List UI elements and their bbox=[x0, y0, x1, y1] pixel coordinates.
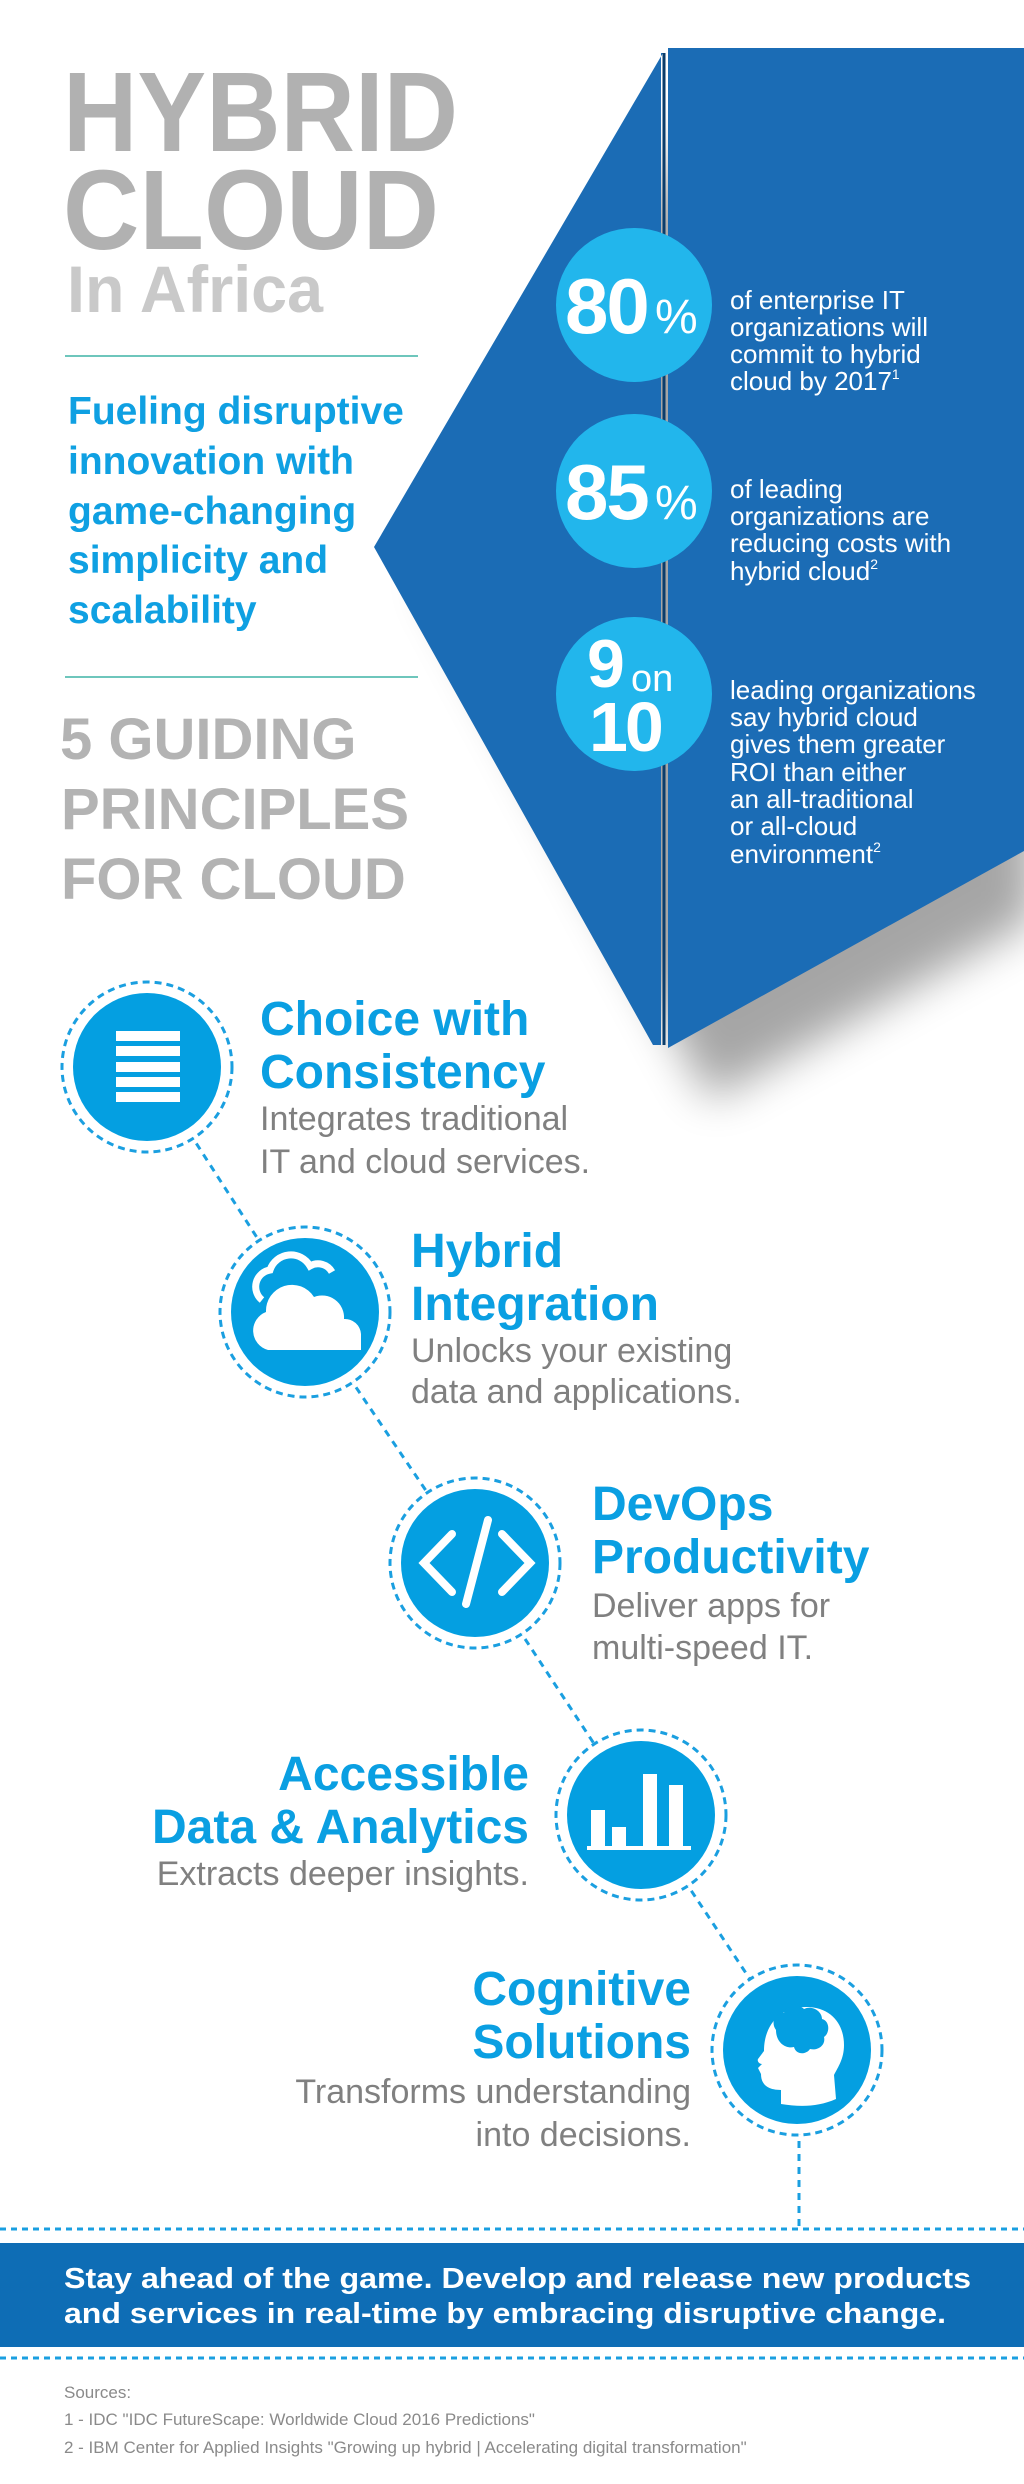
sources: 1 - IDC "IDC FutureScape: Worldwide Cloud 2016 Predictions" bbox=[64, 2410, 535, 2429]
principle 5: cognitive solutions: into decisions. bbox=[476, 2116, 691, 2154]
section heading: 5 guiding principles: FOR CLOUD bbox=[61, 847, 406, 912]
stat: 80% bbox=[556, 228, 928, 396]
banner: call to action bbox=[0, 2243, 1024, 2347]
principle 3: devops productivity: DevOps bbox=[592, 1478, 773, 1531]
banner: call to action: and services in real-time by embracing disruptive change. bbox=[64, 2298, 946, 2330]
section heading: 5 guiding principles: PRINCIPLES bbox=[61, 777, 409, 842]
principle 4: accessible data & analytics: Accessible bbox=[278, 1748, 529, 1801]
subtitle: simplicity and bbox=[68, 539, 328, 582]
stat: 9 on 10: 9 bbox=[587, 626, 625, 702]
stat: 80%: % bbox=[655, 291, 698, 344]
icon: code bbox=[390, 1478, 560, 1648]
stat: 9 on 10: say hybrid cloud bbox=[730, 702, 918, 732]
stat: 80%: commit to hybrid bbox=[730, 339, 921, 369]
stat: 85%: 2 bbox=[870, 556, 878, 572]
stat: 9 on 10: gives them greater bbox=[730, 729, 946, 759]
principle 5: cognitive solutions bbox=[295, 1963, 882, 2154]
subtitle: Fueling disruptive bbox=[68, 390, 404, 433]
stat: 9 on 10: environment bbox=[730, 839, 873, 869]
stat: 85%: hybrid cloud bbox=[730, 556, 870, 586]
principle 2: hybrid integration: Integration bbox=[411, 1278, 659, 1331]
principle 2: hybrid integration bbox=[220, 1225, 742, 1411]
principle 2: hybrid integration: data and applications. bbox=[411, 1373, 742, 1411]
title: In Africa bbox=[67, 252, 324, 326]
principle 1: choice with consistency: Consistency bbox=[260, 1046, 546, 1099]
principle 3: devops productivity: Productivity bbox=[592, 1531, 870, 1584]
principle 1: choice with consistency bbox=[62, 982, 590, 1181]
principle 4: accessible data & analytics: Extracts deeper insights. bbox=[157, 1855, 529, 1893]
section heading: 5 guiding principles bbox=[60, 707, 409, 912]
principle 3: devops productivity bbox=[390, 1478, 870, 1667]
stat: 9 on 10: an all-traditional bbox=[730, 784, 914, 814]
stat: 9 on 10: 2 bbox=[873, 839, 881, 855]
banner: call to action: Stay ahead of the game. Develop and release new products bbox=[64, 2263, 971, 2295]
stat: 9 on 10: leading organizations bbox=[730, 675, 976, 705]
principle 4: accessible data & analytics: Data & Analytics bbox=[152, 1801, 529, 1854]
icon: list bbox=[62, 982, 232, 1152]
principle 3: devops productivity: multi-speed IT. bbox=[592, 1629, 813, 1667]
section heading: 5 guiding principles: 5 GUIDING bbox=[60, 707, 356, 772]
stat: 85%: 85 bbox=[565, 448, 648, 536]
blue arrow panel with stats bbox=[374, 48, 1024, 1100]
principle 5: cognitive solutions: Solutions bbox=[472, 2016, 691, 2069]
subtitle: innovation with bbox=[68, 440, 354, 483]
title: CLOUD bbox=[63, 147, 439, 273]
sources: Sources: bbox=[64, 2383, 131, 2402]
principle 2: hybrid integration: Unlocks your existing bbox=[411, 1332, 732, 1370]
stat: 80%: of enterprise IT bbox=[730, 285, 905, 315]
principle 2: hybrid integration: Hybrid bbox=[411, 1225, 563, 1278]
principle 5: cognitive solutions: Transforms understanding bbox=[295, 2073, 691, 2111]
subtitle: scalability bbox=[68, 589, 257, 632]
principle 1: choice with consistency: Integrates traditional bbox=[260, 1100, 568, 1138]
stat: 9 on 10: ROI than either bbox=[730, 757, 907, 787]
connector lines bbox=[147, 1067, 799, 2229]
icon: cloud bbox=[220, 1227, 390, 1397]
stat: 80%: organizations will bbox=[730, 312, 928, 342]
stat: 85%: % bbox=[655, 477, 698, 530]
principle 1: choice with consistency: Choice with bbox=[260, 993, 529, 1046]
stat: 85% bbox=[556, 414, 951, 586]
stat: 80%: 80 bbox=[565, 262, 648, 350]
sources bbox=[64, 2383, 747, 2457]
principle 3: devops productivity: Deliver apps for bbox=[592, 1587, 830, 1625]
icon: bar chart bbox=[556, 1730, 726, 1900]
title bbox=[63, 49, 458, 326]
stat: 9 on 10 bbox=[556, 617, 976, 869]
principle 5: cognitive solutions: Cognitive bbox=[472, 1963, 691, 2016]
subtitle bbox=[68, 390, 404, 632]
title: HYBRID bbox=[63, 49, 458, 175]
stat: 85%: reducing costs with bbox=[730, 528, 951, 558]
stat: 9 on 10: or all-cloud bbox=[730, 811, 857, 841]
stat: 9 on 10: 10 bbox=[589, 688, 662, 766]
subtitle: game-changing bbox=[68, 490, 356, 533]
stat: 85%: of leading bbox=[730, 474, 843, 504]
principle 1: choice with consistency: IT and cloud services. bbox=[260, 1143, 590, 1181]
principle 4: accessible data & analytics bbox=[152, 1730, 726, 1900]
stat: 85%: organizations are bbox=[730, 501, 929, 531]
stat: 80%: cloud by 2017 bbox=[730, 366, 892, 396]
sources: 2 - IBM Center for Applied Insights "Growing up hybrid | Accelerating digital transformation" bbox=[64, 2438, 747, 2457]
stat: 9 on 10: on bbox=[631, 658, 673, 700]
stat: 80%: 1 bbox=[892, 366, 900, 382]
icon: head with brain bbox=[712, 1965, 882, 2135]
